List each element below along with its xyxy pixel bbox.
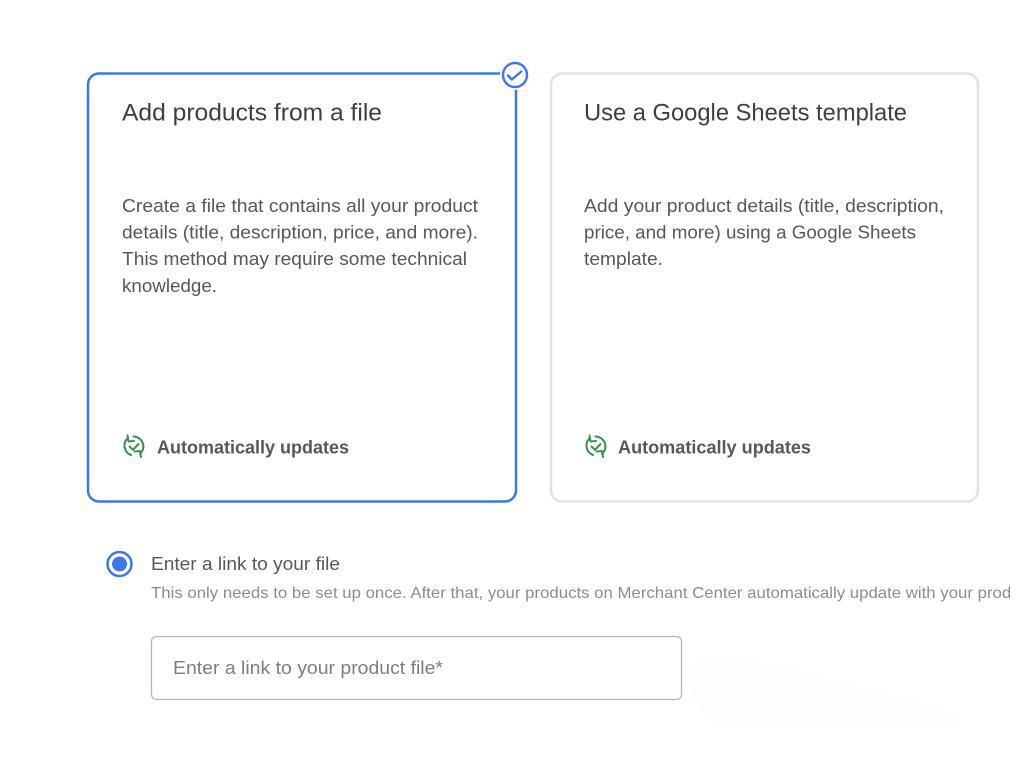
text block: sheets method description: Add your product details (title, description, xyxy=(584,196,944,216)
label: automatically updates: Automatically updates xyxy=(618,438,811,458)
icon: green auto-update cycle xyxy=(124,436,143,457)
badge: selected check xyxy=(500,60,530,90)
text block: file method description: knowledge. xyxy=(122,276,217,296)
input field: product file link xyxy=(152,636,682,700)
panel: use a google sheets template xyxy=(551,74,978,502)
label: automatically updates: Automatically updates xyxy=(157,438,349,458)
text block: sheets method description: template. xyxy=(584,249,663,269)
placeholder: enter a link to your product file: Enter a link to your product file* xyxy=(173,658,443,678)
panel: add products from a file xyxy=(88,74,516,502)
text block: file method description xyxy=(122,196,478,296)
text block: file method description: This method may require some technical xyxy=(122,249,467,269)
icon: green auto-update cycle xyxy=(586,436,605,457)
heading: add products from a file: Add products from a file xyxy=(122,100,382,126)
text block: sheets method description: price, and more) using a Google Sheets xyxy=(584,222,916,242)
text block: file method description: Create a file that contains all your product xyxy=(122,196,478,216)
text block: file method description: details (title, description, price, and more). xyxy=(122,222,478,242)
radio button: selected xyxy=(108,552,132,576)
helper text: set up once: This only needs to be set up once. After that, your products on Merchant Center automatically update with your products xyxy=(151,585,1024,602)
option label: enter a link to your file: Enter a link to your file xyxy=(151,554,340,574)
text block: sheets method description xyxy=(584,196,944,269)
heading: use a google sheets template: Use a Google Sheets template xyxy=(584,100,907,126)
